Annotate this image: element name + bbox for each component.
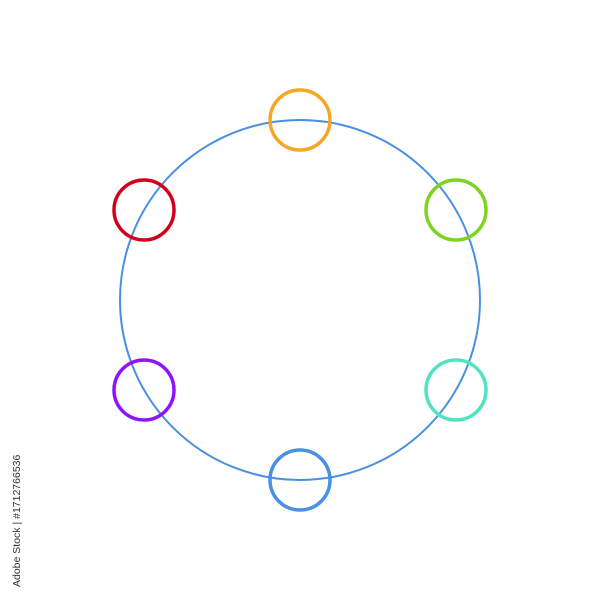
stock id text: Adobe Stock | #1712766536 xyxy=(11,455,23,587)
node: green upper right xyxy=(426,180,486,240)
main ring xyxy=(120,120,480,480)
node: red upper left xyxy=(114,180,174,240)
node: orange top xyxy=(270,90,330,150)
node: blue bottom xyxy=(270,450,330,510)
node: teal lower right xyxy=(426,360,486,420)
node: purple lower left xyxy=(114,360,174,420)
